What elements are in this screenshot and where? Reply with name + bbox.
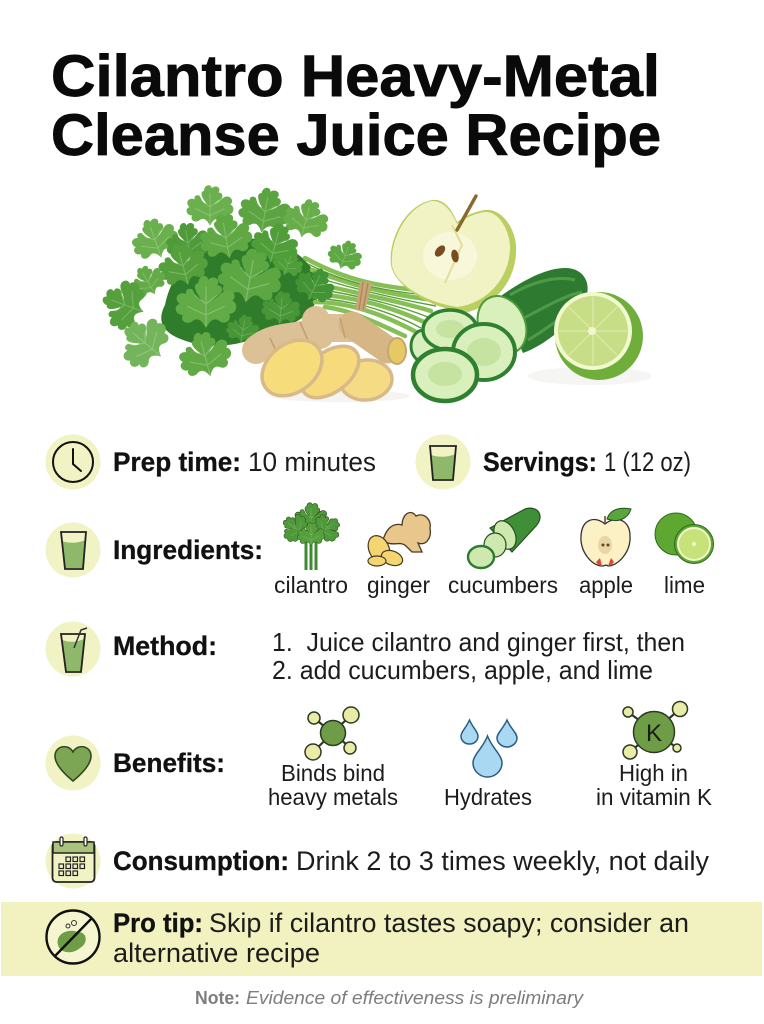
cilantro bunch	[95, 184, 441, 383]
title: Cleanse Juice Recipe	[51, 103, 661, 168]
icon: apple	[581, 508, 631, 566]
method steps	[272, 627, 685, 685]
title: Cilantro Heavy-Metal	[51, 44, 660, 109]
method steps: 1. Juice cilantro and ginger first, then	[272, 627, 685, 657]
hero illustration: juice ingredients	[95, 184, 652, 408]
prep time text: Prep time:	[113, 447, 241, 477]
row: benefits	[46, 702, 713, 810]
title	[51, 44, 661, 168]
prep time text	[113, 447, 376, 477]
consumption text: Drink 2 to 3 times weekly, not daily	[296, 846, 709, 876]
lime half	[554, 292, 643, 380]
row: ingredients	[46, 503, 714, 598]
icon: water drops	[461, 720, 517, 777]
ingredients heading: Ingredients:	[113, 535, 263, 565]
label: high in vitamin K: High in	[619, 760, 688, 786]
method steps: 2. add cucumbers, apple, and lime	[272, 655, 653, 685]
icon: lime	[655, 513, 714, 564]
label: lime: lime	[664, 572, 705, 598]
apple half	[391, 196, 516, 312]
consumption text: Consumption:	[113, 846, 289, 876]
icon: glass	[416, 434, 470, 490]
panel: pro tip	[1, 902, 762, 976]
cucumber with slices	[411, 268, 588, 401]
icon: no soapy cilantro	[46, 910, 100, 964]
label: binds heavy metals	[268, 760, 398, 810]
method heading: Method:	[113, 631, 217, 661]
ginger root	[251, 318, 406, 408]
footnote: Evidence of effectiveness is preliminary	[246, 988, 584, 1008]
benefits heading: Benefits:	[113, 748, 225, 778]
label: ginger: ginger	[367, 572, 430, 598]
consumption text	[113, 846, 709, 876]
label: high in vitamin K	[596, 760, 713, 810]
pro tip text	[113, 908, 689, 968]
icon: juice glass	[46, 522, 100, 578]
icon: vitamin K molecule	[623, 702, 688, 759]
servings text	[483, 447, 691, 477]
icon: clock	[46, 434, 100, 490]
footnote: Note:	[195, 988, 240, 1008]
icon: ginger	[364, 513, 430, 568]
pro tip text: Pro tip:	[113, 908, 203, 938]
icon: vitamin K molecule: K	[646, 720, 662, 747]
row: consumption	[46, 834, 709, 888]
label: hydrates: Hydrates	[444, 784, 532, 810]
servings text: 1 (12 oz)	[604, 447, 691, 477]
icon: molecule	[305, 707, 359, 760]
icon: cucumbers	[468, 508, 540, 568]
servings text: Servings:	[483, 447, 597, 477]
label: cucumbers: cucumbers	[448, 572, 558, 598]
row: prep time	[46, 434, 376, 490]
pro tip text: alternative recipe	[113, 938, 320, 968]
label: binds heavy metals: Binds bind	[281, 760, 385, 786]
icon: cilantro	[276, 503, 346, 570]
icon: calendar	[46, 834, 100, 888]
label: binds heavy metals: heavy metals	[268, 784, 398, 810]
row: method	[46, 622, 685, 685]
label: cilantro: cilantro	[274, 572, 348, 598]
icon: juice with straw	[46, 622, 100, 676]
prep time text: 10 minutes	[248, 447, 376, 477]
label: apple: apple	[579, 572, 633, 598]
label: high in vitamin K: in vitamin K	[596, 784, 713, 810]
row: servings	[416, 434, 691, 490]
twine	[355, 281, 372, 311]
icon: heart	[46, 736, 100, 790]
pro tip text: Skip if cilantro tastes soapy; consider an	[209, 908, 689, 938]
